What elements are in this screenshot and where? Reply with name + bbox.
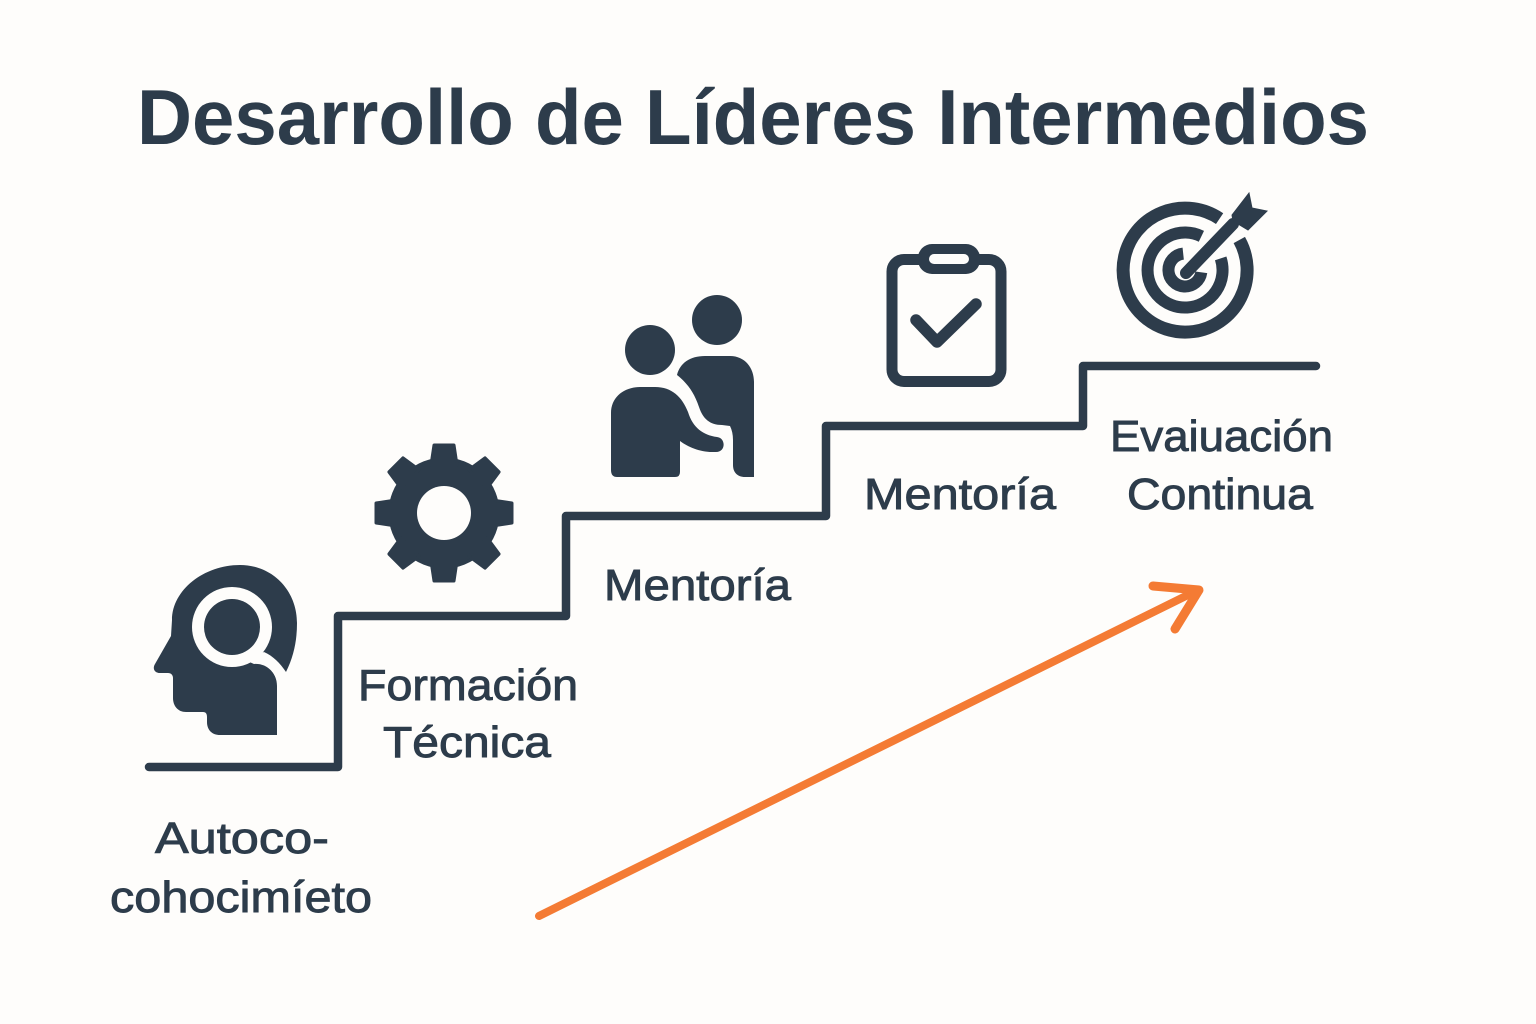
label: Evaluación Continua: Evaiuación: [1110, 412, 1333, 461]
icon: target with arrow: [1123, 193, 1267, 332]
icon: mentor and mentee: [611, 295, 754, 477]
label: Mentoría (step 4): Mentoría: [864, 470, 1057, 519]
label: Autoconocimiento: Autoco-: [155, 814, 329, 863]
label: Formación Técnica: Formación: [358, 661, 578, 710]
icon: head with magnifier: [154, 565, 300, 735]
arrow: orange growth arrow: [539, 586, 1199, 916]
label: Mentoría (step 3): Mentoría: [604, 561, 792, 610]
icon: clipboard with check: [892, 244, 1001, 382]
label: Formación Técnica: Técnica: [383, 718, 552, 767]
label: Formación Técnica: [358, 661, 578, 767]
label: Autoconocimiento: cohocimíeto: [110, 873, 372, 922]
icon: gear: [376, 445, 512, 581]
label: Autoconocimiento: [110, 814, 372, 922]
staircase line: [149, 366, 1316, 767]
label: Evaluación Continua: Continua: [1127, 470, 1314, 519]
title: Desarrollo de Líderes Intermedios: [137, 73, 1369, 161]
label: Evaluación Continua: [1110, 412, 1333, 519]
